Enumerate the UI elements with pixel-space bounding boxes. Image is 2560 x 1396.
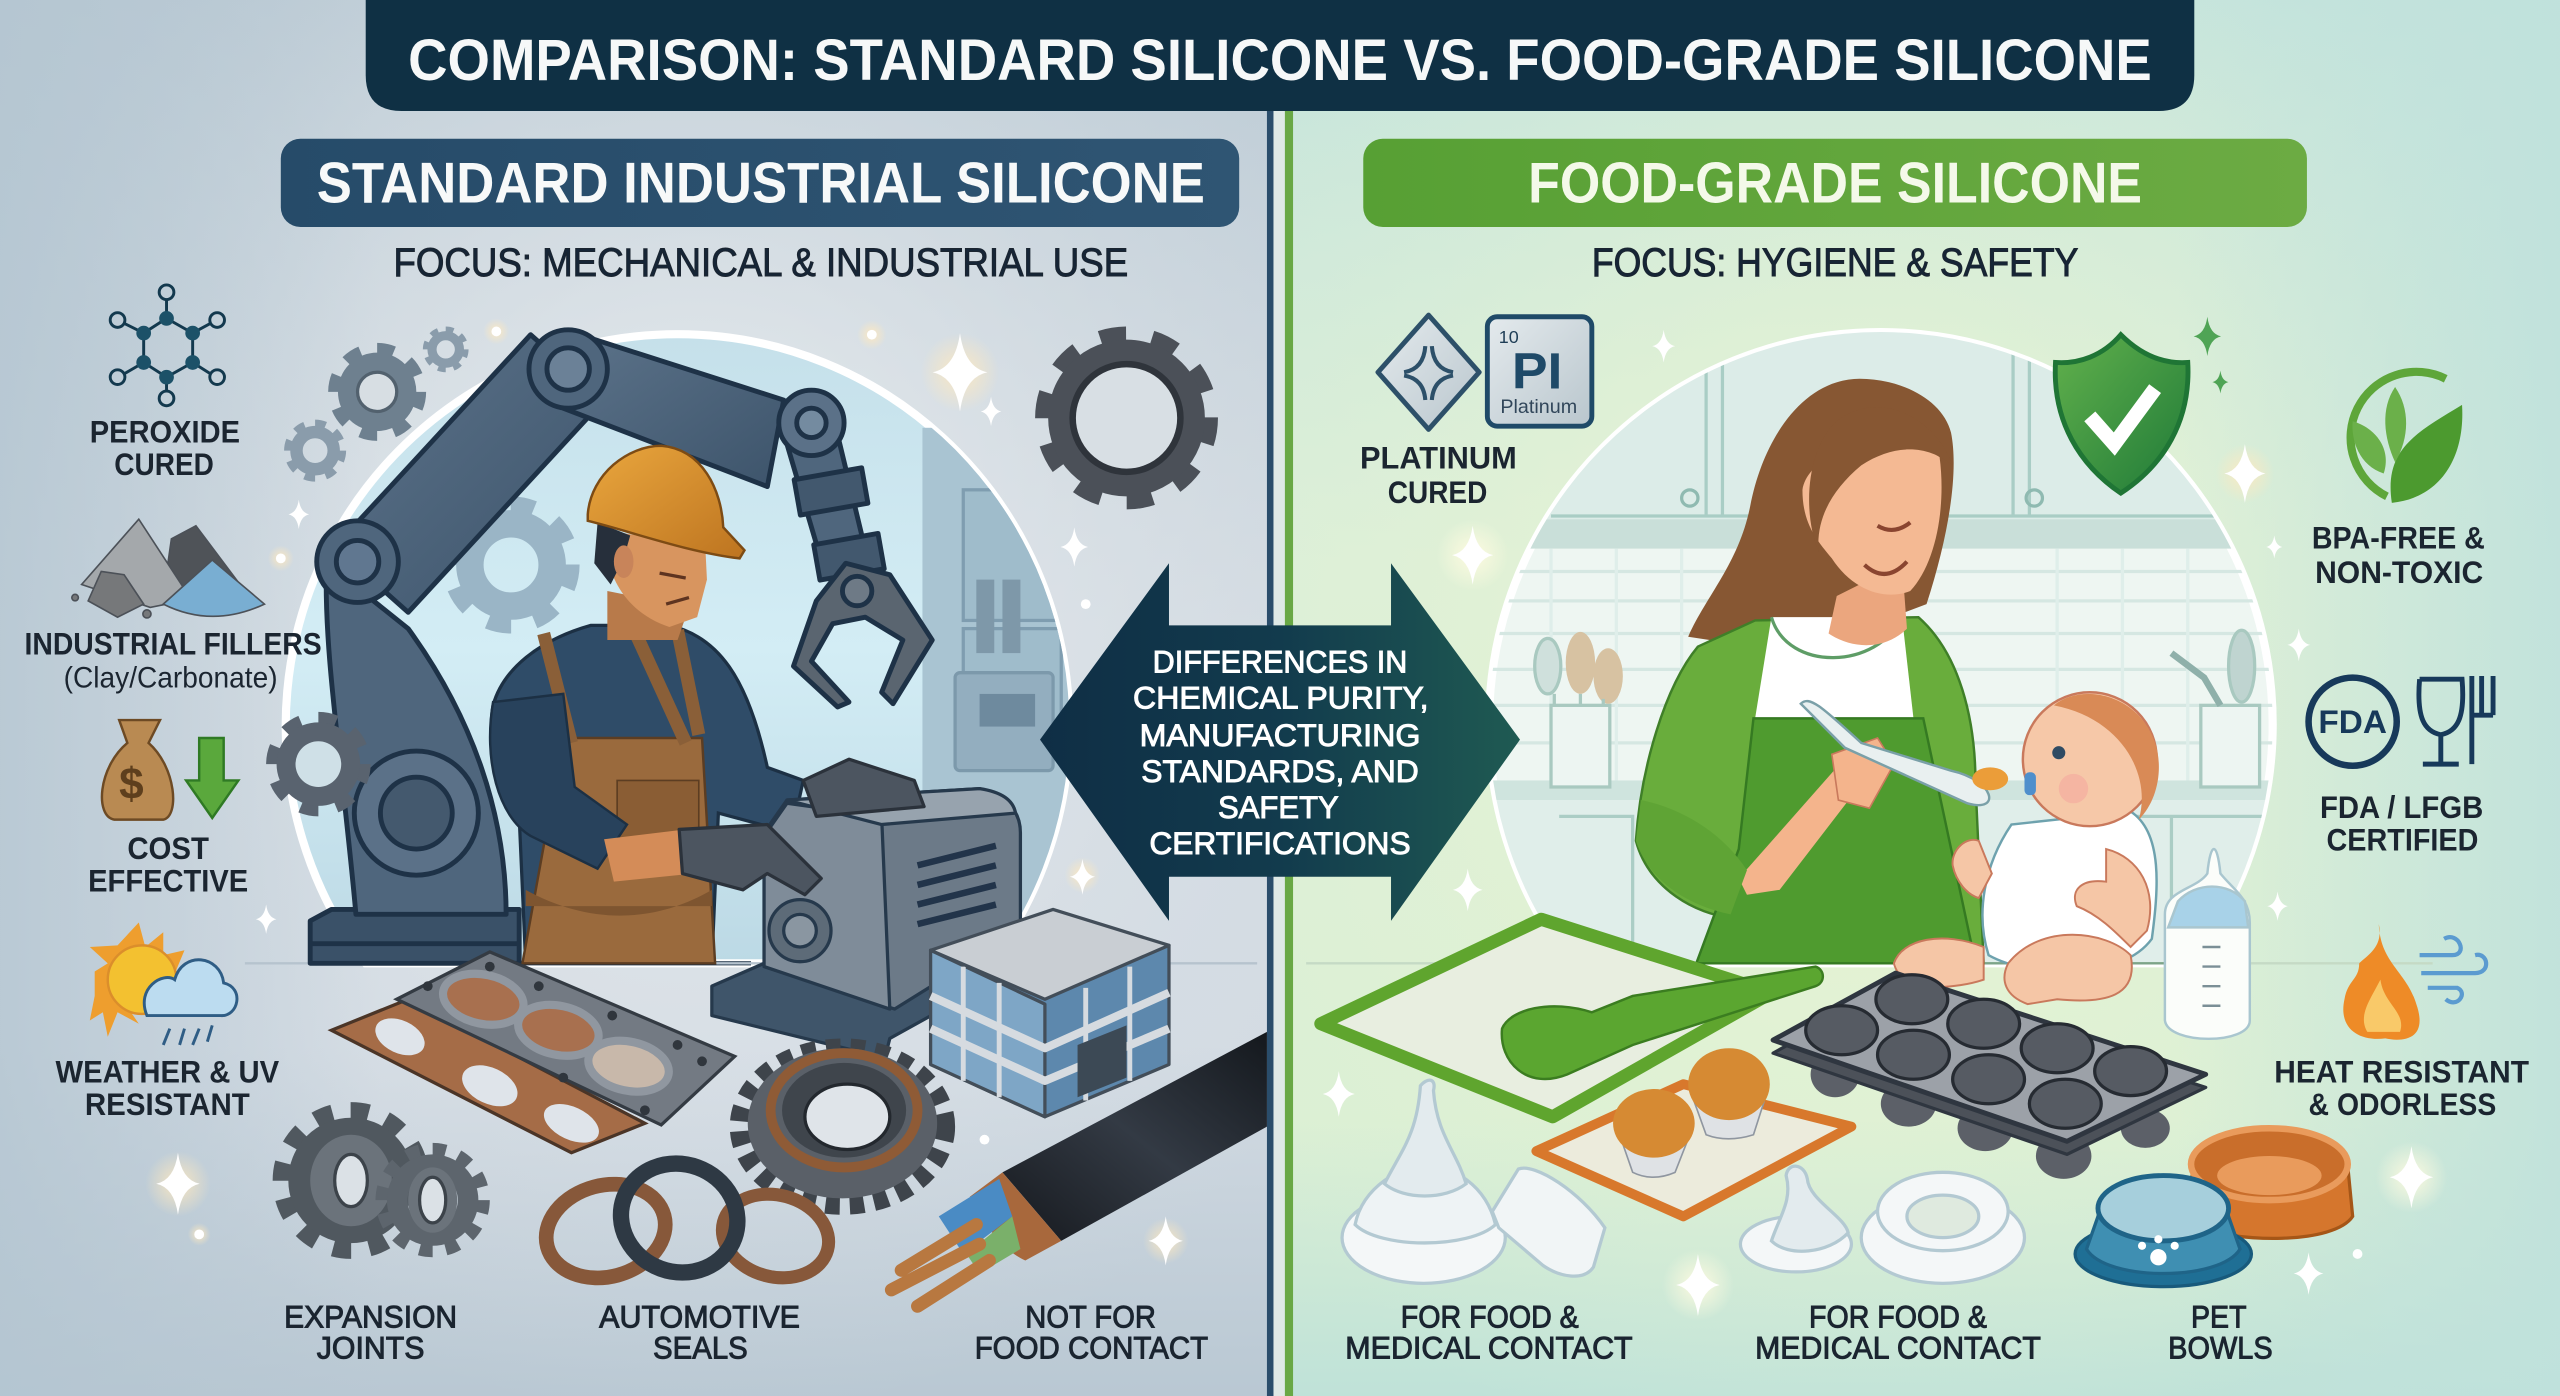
label: for food and medical contact 1: [1345, 1298, 1633, 1365]
label: heat resistant and odorless: & ODORLESS: [2309, 1086, 2496, 1122]
label: not for food contact: NOT FOR: [1025, 1298, 1156, 1334]
label: peroxide cured: CURED: [114, 446, 214, 482]
heading: food-grade silicone: [1363, 139, 2307, 227]
label: expansion joints: JOINTS: [317, 1329, 424, 1365]
illustration: robot arm: [310, 330, 932, 963]
illustration: gaskets: [331, 952, 735, 1153]
title banner: COMPARISON: STANDARD SILICONE VS. FOOD-GRADE SILICONE: [408, 28, 2152, 93]
label: not for food contact: [975, 1298, 1208, 1365]
title banner: [366, 0, 2194, 111]
label: automotive seals: SEALS: [653, 1329, 748, 1365]
label: not for food contact: FOOD CONTACT: [975, 1329, 1208, 1365]
icon: money bag and down arrow: $: [119, 759, 144, 808]
icon: sun and rain cloud: [90, 923, 237, 1045]
icon: FDA seal: FDA: [2318, 703, 2387, 740]
central arrow text: [1133, 644, 1429, 861]
label: fda lfgb certified: CERTIFIED: [2327, 822, 2478, 858]
illustration: clear silicone nipple and ring: [1740, 1166, 2024, 1283]
label: pet bowls: PET: [2191, 1298, 2247, 1334]
label: peroxide cured: [90, 413, 240, 482]
illustration: orange mat and muffins: [1536, 1048, 1851, 1216]
label: heat resistant and odorless: HEAT RESISTANT: [2274, 1054, 2529, 1090]
icon: platinum diamond and element tile: [1378, 315, 1592, 429]
icon: platinum diamond and element tile: PI: [1512, 343, 1562, 400]
central arrow text: DIFFERENCES IN: [1153, 644, 1407, 680]
central arrow text: STANDARDS, AND: [1141, 753, 1419, 789]
central arrow text: CERTIFICATIONS: [1149, 825, 1411, 861]
label: platinum cured: CURED: [1388, 474, 1487, 510]
icon: glass and fork food-safe mark: [2419, 676, 2493, 764]
label: weather and uv resistant: WEATHER & UV: [56, 1054, 280, 1090]
illustration: pet bowls: [2075, 1128, 2353, 1287]
label: industrial fillers: (Clay/Carbonate): [64, 661, 278, 694]
label: expansion joints: [284, 1298, 457, 1365]
icon: FDA seal: [2309, 678, 2397, 766]
icon: green safety shield: [2055, 335, 2188, 493]
label: bpa-free and non-toxic: [2312, 520, 2485, 590]
illustration: baby: [1894, 692, 2159, 1004]
label: expansion joints: EXPANSION: [284, 1298, 457, 1334]
label: for food and medical contact 2: [1755, 1298, 2041, 1365]
central arrow text: MANUFACTURING: [1140, 717, 1420, 753]
icon: money bag and down arrow: [102, 720, 238, 820]
icon: BPA-free leaf: [2351, 372, 2462, 503]
label: cost effective: [88, 830, 248, 898]
label: bpa-free and non-toxic: NON-TOXIC: [2315, 554, 2483, 590]
label: cost effective: EFFECTIVE: [88, 862, 248, 898]
icon: baby bottle: [2165, 849, 2250, 1039]
label: pet bowls: BOWLS: [2168, 1329, 2273, 1365]
illustration: muffin tray: [1773, 973, 2206, 1179]
label: automotive seals: AUTOMOTIVE: [599, 1298, 800, 1334]
sparkles left: [145, 318, 1189, 1265]
illustration: expansion joint gears: [282, 1112, 483, 1250]
central double arrow: [1040, 563, 1520, 921]
heading: standard industrial silicone: STANDARD INDUSTRIAL SILICONE: [317, 151, 1205, 215]
illustration: worker gloves on machine: [679, 759, 924, 895]
illustration: toothed oil seal: [740, 1048, 945, 1205]
panel: standard industrial silicone background: [0, 0, 1270, 1396]
label: automotive seals: [599, 1298, 800, 1365]
label: heat resistant and odorless: [2274, 1054, 2529, 1122]
label: fda lfgb certified: [2320, 789, 2483, 858]
sparkles right: [1323, 317, 2447, 1321]
illustration: green baking mat and spatula: [1321, 919, 1823, 1117]
label: bpa-free and non-toxic: BPA-FREE &: [2312, 520, 2485, 556]
label: for food and medical contact 1: MEDICAL CONTACT: [1345, 1329, 1633, 1365]
illustration: cable: [891, 1032, 1267, 1306]
icon: large dark gear: [1045, 336, 1208, 500]
label: cost effective: COST: [127, 830, 209, 866]
label: industrial fillers: INDUSTRIAL FILLERS: [24, 626, 322, 662]
illustration: mother: [1636, 379, 2008, 963]
heading: food-grade silicone: FOOD-GRADE SILICONE: [1528, 151, 2142, 215]
scene: industrial workshop circle: [245, 334, 1257, 967]
icon: platinum diamond and element tile: 10: [1499, 327, 1519, 347]
subheading: right focus: FOCUS: HYGIENE & SAFETY: [1592, 241, 2078, 285]
illustration: automotive seal rings: [536, 1147, 838, 1291]
label: for food and medical contact 2: FOR FOOD &: [1809, 1298, 1987, 1334]
label: for food and medical contact 1: FOR FOOD &: [1401, 1298, 1579, 1334]
panel: food-grade silicone background: [1283, 0, 2560, 1396]
illustration: gray machine: [712, 789, 1020, 1058]
label: industrial fillers: [24, 626, 322, 694]
illustration: clear silicone bottle parts left: [1342, 1080, 1605, 1283]
icon: utensil jars: [1535, 630, 2260, 787]
central arrow text: CHEMICAL PURITY,: [1133, 680, 1429, 716]
scene: kitchen circle: [1306, 327, 2433, 967]
label: pet bowls: [2168, 1298, 2273, 1365]
label: weather and uv resistant: RESISTANT: [85, 1086, 250, 1122]
subheading: left focus: FOCUS: MECHANICAL & INDUSTRIAL USE: [393, 241, 1128, 285]
label: for food and medical contact 2: MEDICAL CONTACT: [1755, 1329, 2041, 1365]
illustration: building block: [931, 909, 1169, 1117]
central arrow text: SAFETY: [1218, 789, 1339, 825]
icon: gear beside robot pillar: [272, 718, 364, 810]
icon: platinum diamond and element tile: Platinum: [1500, 396, 1577, 418]
icon: industrial filler piles: [72, 519, 264, 618]
label: fda lfgb certified: FDA / LFGB: [2320, 789, 2483, 825]
label: platinum cured: [1360, 440, 1517, 510]
heading: standard industrial silicone: [281, 139, 1239, 227]
icon: peroxide molecule: [110, 285, 224, 406]
icon: flame and wind: [2343, 924, 2486, 1040]
label: weather and uv resistant: [56, 1054, 280, 1122]
illustration: factory worker: [490, 446, 803, 963]
label: platinum cured: PLATINUM: [1360, 440, 1517, 476]
label: peroxide cured: PEROXIDE: [90, 413, 240, 449]
icon: background gears: [288, 329, 466, 478]
